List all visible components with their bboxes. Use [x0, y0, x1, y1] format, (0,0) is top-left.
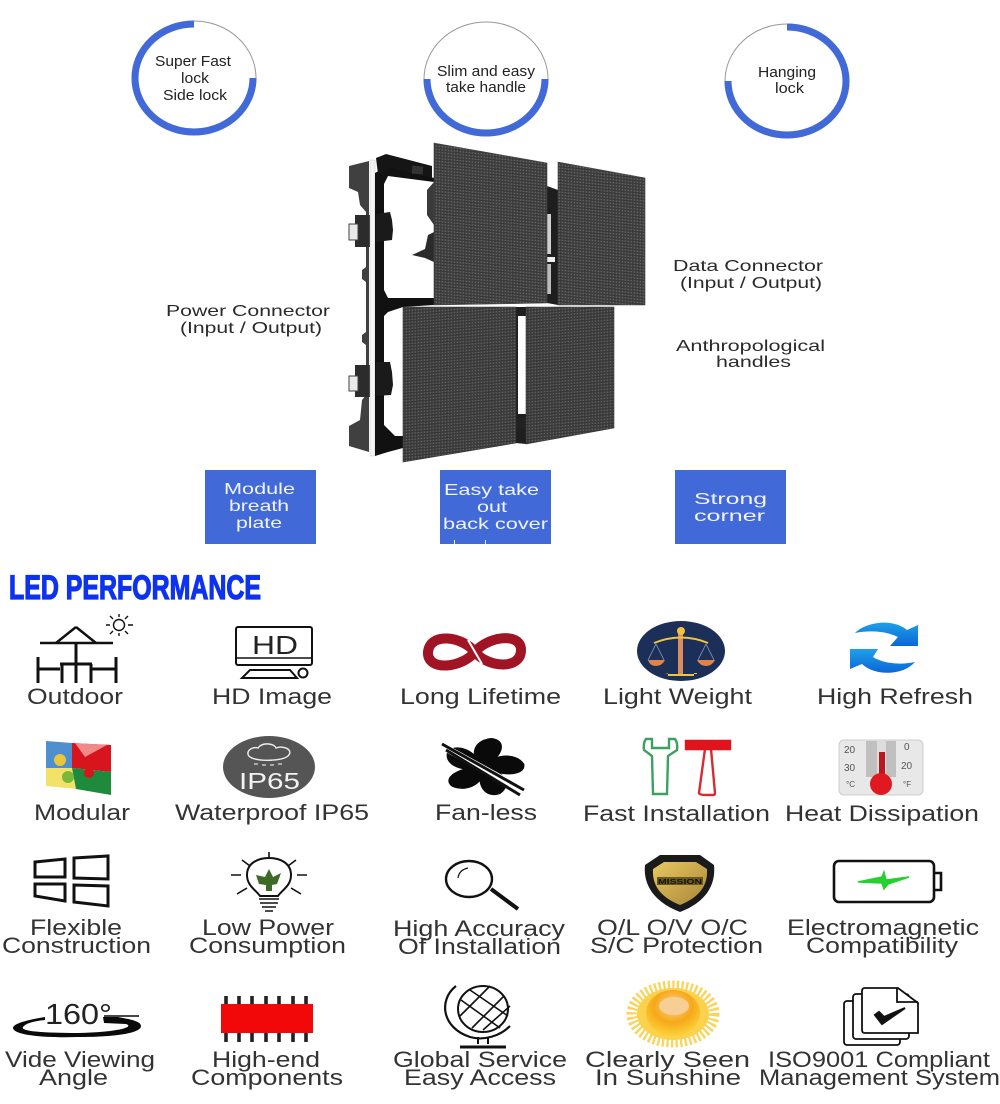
label: data connector: [673, 258, 824, 292]
callout ring: hanging lock: lock: [775, 80, 805, 97]
blue box: easy take out back cover: back cover: [443, 516, 549, 533]
label: power connector: [166, 303, 331, 337]
icon: puzzle cube: [46, 741, 111, 795]
blue box: easy take out back cover: Easy take: [444, 482, 539, 499]
feature: clearly seen in sunshine: In Sunshine: [595, 1065, 741, 1090]
feature: high-end components: Components: [191, 1065, 343, 1090]
callout ring: slim and easy take handle: [424, 22, 548, 136]
feature: protection: [590, 855, 763, 958]
icon: magnifier: [446, 861, 518, 909]
feature: flexible construction: [2, 856, 151, 958]
icon: crossed-out fan: [442, 738, 527, 798]
blue box: easy take out back cover: [440, 470, 551, 544]
icon: wrench and hammer: [644, 739, 730, 795]
LED module: top right: [558, 162, 645, 305]
feature: high-end components: High-end: [212, 1047, 320, 1072]
feature: flexible construction: Construction: [2, 933, 151, 958]
feature: low power consumption: Consumption: [189, 933, 346, 958]
icon: thermometer: °C: [846, 780, 855, 789]
feature: outdoor: [27, 614, 133, 709]
icon: thermometer: 30: [844, 763, 856, 774]
feature: light weight: [603, 621, 752, 709]
feature: high refresh: [817, 623, 973, 709]
label: anthropological handles: Anthropological: [676, 338, 825, 355]
icon: IP65 badge: IP65: [239, 768, 300, 794]
icon: 160 degree rotation: [13, 999, 141, 1037]
feature: electromagnetic compatibility: Electromagnetic: [787, 915, 979, 940]
icon: red chip: [221, 996, 313, 1042]
label: anthropological handles: [676, 338, 825, 371]
callout ring: hanging lock: [725, 24, 849, 138]
callout ring: super fast lock side lock: [132, 21, 256, 135]
blue box: strong corner: Strong: [694, 491, 767, 508]
feature: high refresh: High Refresh: [817, 684, 973, 709]
feature: global service: Easy Access: [404, 1065, 556, 1090]
icon: balance scale: [637, 621, 725, 681]
icon: battery: [834, 861, 941, 902]
feature: global service: [393, 986, 567, 1090]
callout ring: super fast lock side lock: Super Fast: [155, 53, 232, 70]
feature: ISO9001 compliant: Management System: [759, 1065, 1000, 1090]
icon: outdoor umbrella and table: [38, 614, 133, 683]
LED module: top left: [434, 143, 547, 305]
icon: red infinity: [428, 638, 521, 666]
feature: waterproof IP65: [175, 736, 369, 825]
callout ring: super fast lock side lock: lock: [181, 70, 210, 87]
feature: long lifetime: [400, 638, 561, 709]
icon: refresh arrows: [850, 623, 918, 673]
icon: window panes: [35, 856, 108, 906]
feature: outdoor: Outdoor: [27, 684, 123, 709]
feature: wide viewing angle: Angle: [39, 1065, 108, 1090]
label: data connector: (Input / Output): [680, 275, 822, 292]
feature: fan-less: [435, 738, 537, 825]
icon: desk globe: [445, 986, 510, 1047]
feature: fast installation: [583, 739, 770, 826]
feature: fan-less: Fan-less: [435, 800, 537, 825]
feature: clearly seen in sunshine: Clearly Seen: [585, 1047, 750, 1072]
icon: thermometer: 20: [901, 761, 913, 772]
feature: protection: S/C Protection: [590, 933, 763, 958]
feature: protection: O/L O/V O/C: [597, 915, 748, 940]
LED module: bottom left: [403, 307, 516, 462]
blue box: strong corner: corner: [694, 508, 766, 525]
feature: heat dissipation: [785, 740, 979, 826]
callout ring: hanging lock: Hanging: [758, 64, 816, 81]
feature: electromagnetic compatibility: [787, 861, 979, 958]
heading: LED performance: LED PERFORMANCE: [9, 569, 261, 607]
blue box: module breath plate: breath: [229, 498, 289, 515]
blue box: easy take out back cover: out: [477, 499, 508, 516]
label: anthropological handles: handles: [716, 354, 791, 371]
feature: ISO9001 compliant: [759, 988, 1000, 1090]
callout ring: super fast lock side lock: Side lock: [163, 87, 228, 104]
feature: long lifetime: Long Lifetime: [400, 684, 561, 709]
LED cabinet product illustration: [349, 143, 645, 462]
feature: global service: Global Service: [393, 1047, 567, 1072]
icon: sun: [633, 987, 713, 1041]
blue box: module breath plate: Module: [224, 481, 295, 498]
callout ring: slim and easy take handle: take handle: [446, 79, 526, 96]
feature: modular: [34, 741, 130, 825]
icon: mission shield: [645, 855, 714, 912]
LED module: bottom right: [526, 307, 614, 444]
feature: low power consumption: [189, 852, 346, 958]
feature: clearly seen in sunshine: [585, 987, 750, 1090]
icon: HD monitor: HD: [252, 630, 298, 660]
feature: high-end components: [191, 996, 343, 1090]
feature: fast installation: Fast Installation: [583, 801, 770, 826]
feature: ISO9001 compliant: ISO9001 Compliant: [768, 1047, 990, 1072]
feature: waterproof IP65: Waterproof IP65: [175, 800, 369, 825]
feature: high accuracy of installation: High Accuracy: [393, 916, 565, 941]
feature: heat dissipation: Heat Dissipation: [785, 801, 979, 826]
icon: 160 degree rotation: 160°: [45, 999, 112, 1031]
icon: thermometer: 20: [844, 745, 856, 756]
feature: HD image: [212, 627, 332, 709]
blue box: module breath plate: plate: [236, 515, 282, 532]
icon: stacked checked documents: [844, 988, 918, 1045]
icon: IP65 badge: [223, 736, 315, 798]
icon: thermometer: 0: [904, 742, 910, 753]
blue box: module breath plate: [205, 470, 316, 544]
blue box: strong corner: [675, 470, 786, 544]
icon: leaf light bulb: [231, 852, 307, 911]
label: power connector: Power Connector: [166, 303, 331, 320]
icon: thermometer: [839, 740, 923, 795]
feature: modular: Modular: [34, 800, 130, 825]
feature: wide viewing angle: [5, 999, 155, 1090]
feature: flexible construction: Flexible: [30, 915, 122, 940]
feature: light weight: Light Weight: [603, 684, 752, 709]
callout ring: slim and easy take handle: Slim and easy: [437, 63, 536, 80]
feature: high accuracy of installation: [393, 861, 565, 959]
cabinet frame: [349, 154, 558, 456]
feature: wide viewing angle: Vide Viewing: [5, 1047, 155, 1072]
feature: electromagnetic compatibility: Compatibility: [806, 933, 958, 958]
feature: low power consumption: Low Power: [202, 915, 334, 940]
label: data connector: Data Connector: [673, 258, 824, 275]
icon: mission shield: MISSION: [658, 879, 702, 886]
feature: HD image: HD Image: [212, 684, 332, 709]
icon: thermometer: °F: [903, 780, 911, 789]
feature: high accuracy of installation: Of Installation: [398, 934, 561, 959]
label: power connector: (Input / Output): [180, 320, 322, 337]
